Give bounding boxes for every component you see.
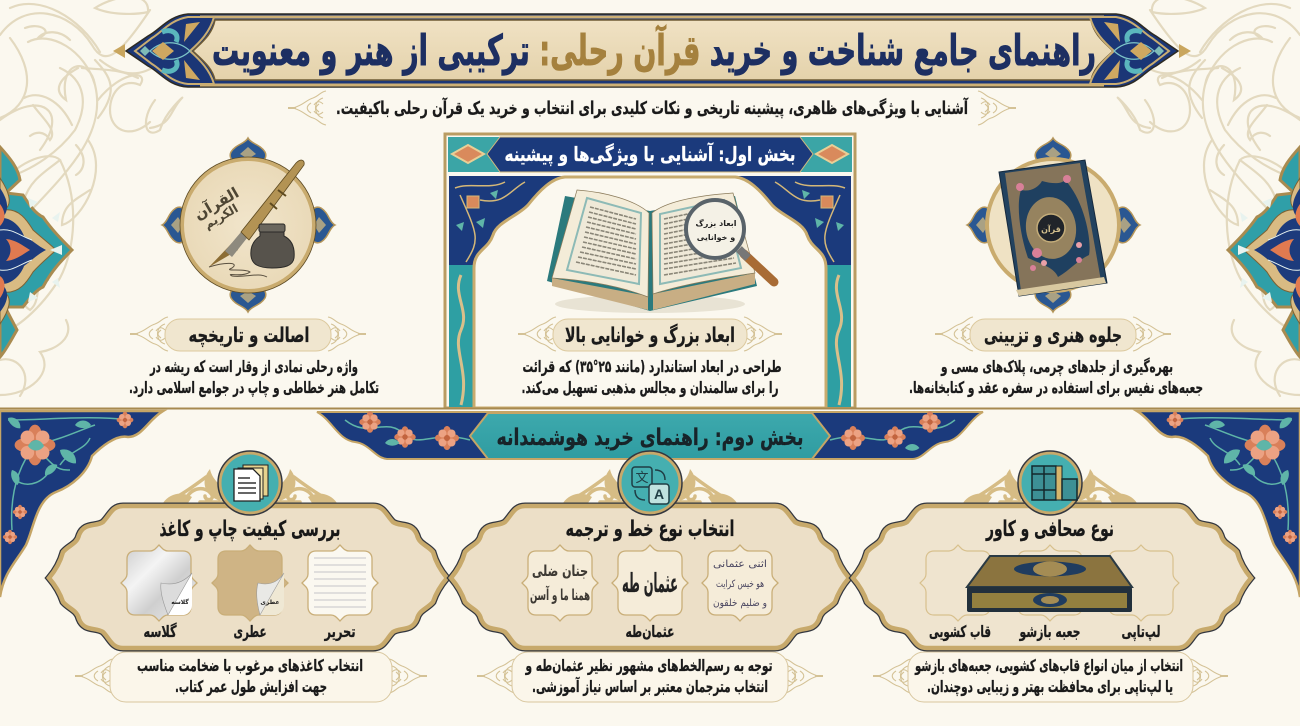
- left spandrel: [0, 411, 163, 597]
- icon: translation: 文: [635, 467, 649, 486]
- caption pill: [75, 652, 427, 702]
- banner arrow left: [113, 44, 125, 58]
- card body: [853, 506, 1251, 648]
- caption pill: یا لپ‌تاپی برای محافظت بهتر و زیبایی دوچندان.: [927, 677, 1173, 697]
- decorative arabesque top-right: [1090, 0, 1300, 396]
- card title: نوع صحافی و کاور: [985, 517, 1114, 542]
- section two ornamental band: [0, 411, 1300, 597]
- tile: writing paper: تحریر: [324, 622, 356, 641]
- card body: [451, 506, 849, 648]
- label pill: large size: [518, 317, 782, 351]
- tile: script sample right: و ضلیم خلقون: [713, 598, 767, 609]
- body text: history: [129, 357, 379, 398]
- label pill: history: اصالت و تاریخچه: [188, 323, 310, 347]
- tile: script sample left: همنا ما و آسن: [530, 586, 590, 604]
- section one header: [448, 137, 852, 172]
- tile: script sample right: [702, 545, 778, 621]
- subtitle: [288, 91, 1016, 125]
- tile: uthman taha: عثمان‌طه: [626, 622, 674, 641]
- icon: pen and ink medallion: القرآن: [191, 184, 242, 224]
- icon: translation: A: [654, 486, 664, 502]
- tile: script sample right: هو خیس کرایت: [716, 579, 764, 590]
- banner ornament left: [135, 17, 214, 84]
- icon: ornate quran cover medallion: [967, 138, 1140, 312]
- central strip: [317, 411, 983, 459]
- crest ornament: [563, 469, 737, 503]
- icon: open book with magnifier: [547, 190, 774, 313]
- section divider: [0, 408, 1300, 410]
- tile: script sample left: جنان ضلی: [532, 562, 588, 580]
- icon: documents: [218, 451, 282, 515]
- panel: artistic appearance: [909, 138, 1203, 397]
- body text: large size: طراحی در ابعاد استاندارد (مانند ۲۵°۳۵) که قرائت: [522, 357, 782, 376]
- tile: glossy paper: [121, 545, 197, 641]
- tile: cream paper: عطری: [234, 622, 266, 641]
- body text: history: واژه رحلی نمادی از وقار است که ریشه در: [149, 357, 358, 376]
- caption pill: انتخاب مترجمان معتبر بر اساس نیاز آموزشی.: [532, 676, 768, 696]
- crest ornament: [963, 469, 1137, 503]
- label pill: large size: ابعاد بزرگ و خوانایی بالا: [565, 323, 735, 347]
- panel: authenticity and history: [129, 138, 379, 398]
- icon: translation: [618, 451, 682, 515]
- body text: history: تکامل هنر خطاطی و چاپ در جوامع اسلامی دارد.: [129, 378, 379, 398]
- icon: books: [1018, 451, 1082, 515]
- card title: انتخاب نوع خط و ترجمه: [566, 517, 734, 542]
- right spandrel: [1137, 411, 1300, 597]
- magnifier: و خوانایی: [697, 233, 735, 242]
- title: راهنمای جامع شناخت و خرید قرآن رحلی: ترکیبی از هنر و معنویت: [212, 25, 1096, 76]
- banner ornament right: [1090, 17, 1169, 84]
- section two header: بخش دوم: راهنمای خرید هوشمندانه: [496, 425, 804, 451]
- tile: uthman taha: [612, 545, 688, 641]
- tile: writing paper: [302, 545, 378, 641]
- section one arch frame: [449, 176, 851, 408]
- icon: ornate quran cover medallion: قرآن: [1041, 224, 1061, 234]
- side medallion right: [1228, 147, 1300, 357]
- panel: script and translation: [451, 451, 849, 702]
- tile: cream paper: [212, 545, 288, 641]
- label pill: artistic: [935, 317, 1171, 351]
- icon: closed ornate book: [967, 556, 1132, 612]
- icon: pen and ink medallion: [162, 138, 335, 312]
- tile labels: قاب کشویی: [929, 622, 991, 641]
- side medallion left: [0, 147, 72, 357]
- tiles outlines: [920, 545, 1179, 621]
- caption pill: جهت افزایش طول عمر کتاب.: [175, 677, 327, 696]
- panel: section one frame: [445, 134, 855, 408]
- tile: script sample right: اثنی عثمانی: [713, 559, 767, 570]
- body text: artistic: بهره‌گیری از جلدهای چرمی، پلاک‌های مسی و: [940, 357, 1173, 377]
- icon: pen and ink medallion: الکریم: [201, 201, 241, 232]
- caption pill: [477, 652, 823, 702]
- body text: large size: را برای سالمندان و مجالس مذهبی تسهیل می‌کند.: [522, 378, 778, 397]
- tile: glossy paper: گلاسه: [144, 622, 177, 641]
- tile: script sample left: [522, 545, 598, 621]
- caption pill: [873, 652, 1228, 702]
- tile: glossy paper: گلاسه: [171, 598, 189, 606]
- tile labels: جعبه بازشو: [1019, 622, 1080, 641]
- card title: بررسی کیفیت چاپ و کاغذ: [160, 517, 340, 542]
- decorative arabesque top-left: [0, 0, 210, 396]
- panel: print and paper quality: [49, 451, 447, 702]
- subtitle ornament right: [978, 91, 1016, 125]
- title banner: [113, 14, 1191, 87]
- card body: [49, 506, 447, 648]
- section one header: بخش اول: آشنایی با ویژگی‌ها و پیشینه: [504, 142, 796, 166]
- subtitle: آشنایی با ویژگی‌های ظاهری، پیشینه تاریخی و نکات کلیدی برای انتخاب و خرید یک قرآن رحلی باکیفیت.: [336, 96, 969, 119]
- tile labels: [929, 622, 1160, 642]
- caption pill: انتخاب کاغذهای مرغوب با ضخامت مناسب: [137, 656, 363, 675]
- tile: uthman taha: عثمان طه: [622, 569, 678, 599]
- body text: large size: [522, 357, 782, 397]
- magnifier: [686, 200, 774, 282]
- caption pill: توجه به رسم‌الخط‌های مشهور نظیر عثمان‌طه و: [525, 656, 772, 675]
- label pill: history: [130, 317, 366, 351]
- tile labels: لپ‌تاپی: [1122, 622, 1160, 642]
- tile: cream paper: عطری: [260, 599, 280, 606]
- section two header: [470, 413, 830, 459]
- subtitle ornament left: [288, 91, 326, 125]
- magnifier: ابعاد بزرگ: [696, 218, 737, 228]
- banner centre plate: [193, 20, 1113, 80]
- crest ornament: [163, 469, 337, 503]
- banner arrow right: [1179, 44, 1191, 58]
- panel: binding and cover: [853, 451, 1251, 702]
- body text: artistic: [909, 357, 1203, 397]
- label pill: artistic: جلوه هنری و تزیینی: [984, 323, 1122, 347]
